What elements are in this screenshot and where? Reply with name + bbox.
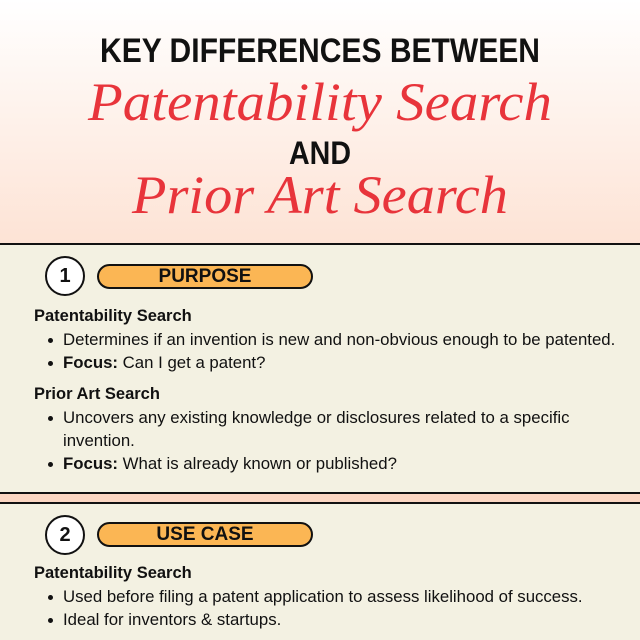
bullets: Ideal for inventors & startups. (63, 610, 281, 629)
heading: Prior Art Search (34, 385, 160, 403)
title: Patentability Search: Patentability Search (87, 72, 552, 132)
bullets: Focus: What is already known or published? (63, 454, 397, 473)
heading: Patentability Search (34, 307, 192, 325)
pill: use case (97, 522, 313, 547)
pill: purpose: PURPOSE (159, 266, 251, 287)
bullets: Determines if an invention is new and non-obvious enough to be patented. (63, 330, 615, 349)
bullets (48, 408, 570, 473)
bullets: Uncovers any existing knowledge or disclosures related to a specific invention. (63, 408, 570, 450)
bullets: Used before filing a patent application to assess likelihood of success. (63, 587, 583, 606)
title: AND: AND (289, 135, 351, 171)
number 2 (45, 515, 85, 555)
title: Prior Art Search: Prior Art Search (131, 165, 508, 225)
number 1: 1 (59, 265, 71, 287)
bullets (48, 587, 583, 629)
title line 1: KEY DIFFERENCES BETWEEN (100, 32, 540, 70)
header (0, 0, 640, 245)
pill: purpose (97, 264, 313, 289)
pill: use case: USE CASE (156, 524, 254, 545)
heading: Patentability Search (34, 564, 192, 582)
number 2: 2 (59, 524, 71, 546)
bullets (48, 330, 615, 372)
panel: purpose (34, 256, 615, 473)
bullets: Focus: Can I get a patent? (63, 353, 265, 372)
number 1 (45, 256, 85, 296)
panel: use case (34, 515, 583, 629)
